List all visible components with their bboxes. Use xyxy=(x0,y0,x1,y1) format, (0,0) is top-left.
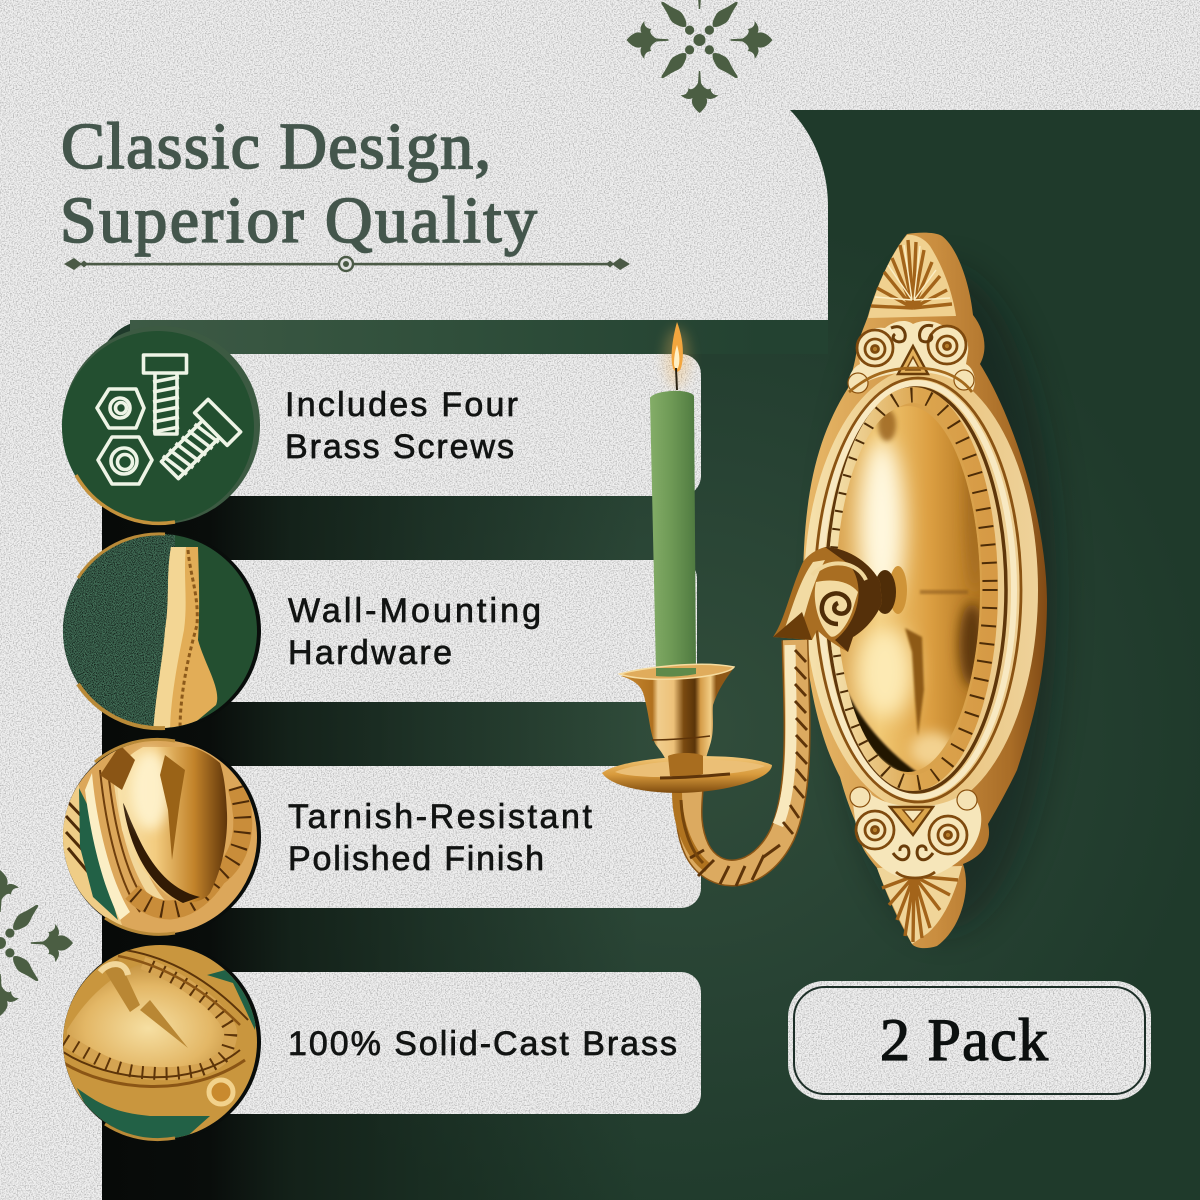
badge: solid brass close-up xyxy=(60,943,265,1149)
ornament: top snowflake xyxy=(626,0,772,113)
title divider xyxy=(64,257,630,271)
feature 1: text: Includes Four xyxy=(285,386,518,424)
bottom fan xyxy=(877,866,962,944)
feature 3: text: Polished Finish xyxy=(288,840,544,878)
sconce drip pan xyxy=(602,753,772,793)
ornament: left snowflake xyxy=(0,870,73,1016)
2 pack badge: 2 Pack xyxy=(880,1007,1048,1073)
feature 2: text: Hardware xyxy=(288,634,452,672)
icon: screws and nuts badge xyxy=(62,326,260,524)
candle xyxy=(650,322,696,672)
bottom scrolls xyxy=(850,787,981,878)
sconce backplate xyxy=(803,233,1047,948)
feature 3: text xyxy=(288,798,593,878)
flame xyxy=(664,322,690,390)
front oval rings xyxy=(804,368,1038,812)
feature 2: text xyxy=(288,592,541,672)
sconce shadow xyxy=(833,270,1057,930)
badge: polished finish close-up xyxy=(60,738,265,943)
icon: angled bolt xyxy=(154,399,241,486)
title: Superior Quality xyxy=(60,184,537,257)
dome xyxy=(836,406,985,778)
title: Classic Design, xyxy=(61,110,491,183)
feature 4: text: 100% Solid-Cast Brass xyxy=(288,1025,677,1063)
feature cards xyxy=(180,354,701,1114)
badge: wall mount close-up xyxy=(60,530,265,735)
feature 1: text xyxy=(285,386,518,466)
sconce mount xyxy=(874,566,907,614)
top fan xyxy=(868,235,956,318)
icon: large nut xyxy=(98,437,152,484)
sconce arm xyxy=(677,640,807,886)
icon: small nut xyxy=(97,389,144,428)
icon: vertical bolt xyxy=(144,355,186,434)
top scrolls xyxy=(848,321,975,393)
sconce candle cup xyxy=(620,664,734,776)
title xyxy=(60,110,537,257)
feature 1: text: Brass Screws xyxy=(285,428,514,466)
feature 2: text: Wall-Mounting xyxy=(288,592,541,630)
feature 3: text: Tarnish-Resistant xyxy=(288,798,593,836)
sconce scroll head xyxy=(773,547,882,652)
2 pack badge xyxy=(788,981,1151,1100)
